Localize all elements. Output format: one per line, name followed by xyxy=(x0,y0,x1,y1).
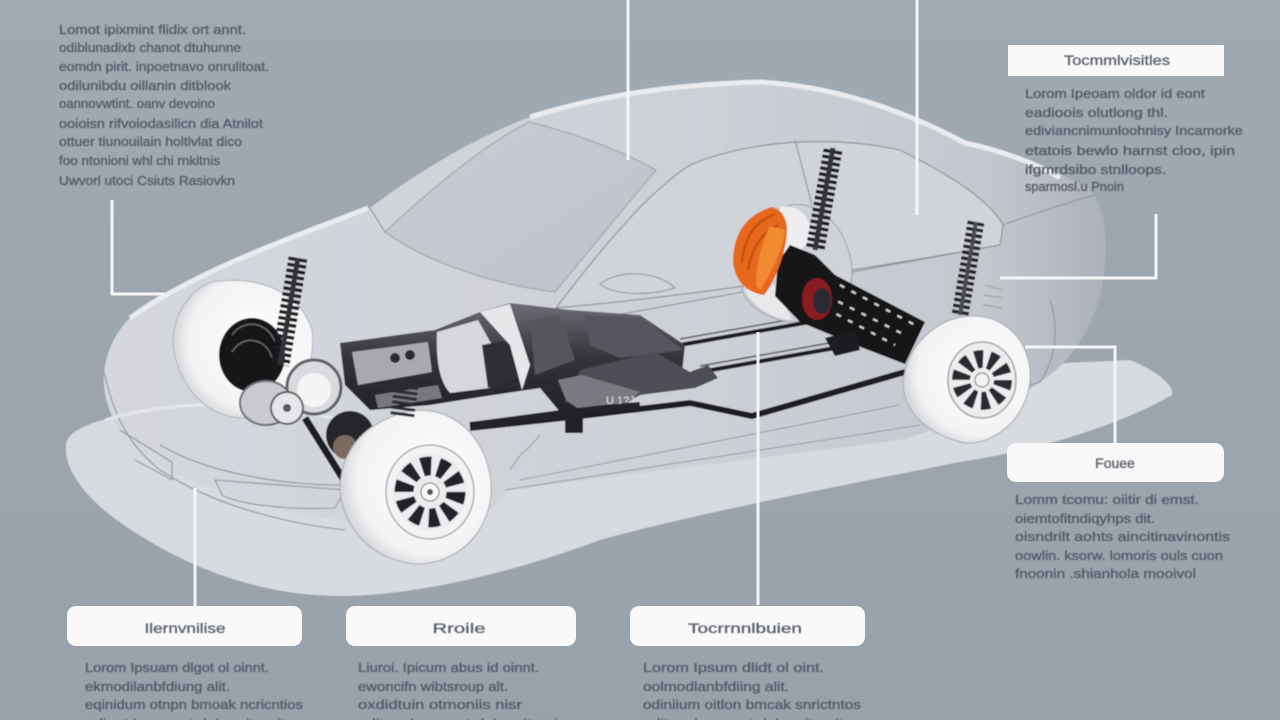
panel: top-right label and text: Lorom Ipeoam oldor id eont xyxy=(1025,86,1205,101)
rear axle xyxy=(775,245,925,364)
panel: bottom label 2 xyxy=(346,606,576,720)
engine bright frame xyxy=(352,342,432,385)
panel: bottom label 1: ekmodilanbfdiung alit. xyxy=(85,679,230,694)
panel: bottom label 1 xyxy=(67,606,304,720)
front wheel spokes xyxy=(404,466,456,518)
panel: top-right label and text: eadioois olutlong thl. xyxy=(1025,105,1168,120)
panel: right label and text: oiemtofitndiqyhps dit. xyxy=(1015,511,1155,526)
panel: right label and text: Lomm tcomu: oiitir di emst. xyxy=(1015,492,1199,507)
front wheel xyxy=(340,410,491,564)
panel: bottom label 3 xyxy=(630,606,865,720)
front strut spring xyxy=(402,380,407,418)
side window and body lines xyxy=(556,142,1003,308)
panel: bottom label 3: oolmodlanbfdiing alit. xyxy=(643,679,789,694)
leader lines xyxy=(112,0,1156,606)
panel: top-left text: ottuer tiunouilain holtlvlat dico xyxy=(59,134,242,149)
panel: bottom label 3: Lorom Ipsum dlidt ol oint. xyxy=(643,660,824,675)
rear dome xyxy=(742,205,852,322)
illustration: car cutaway xyxy=(66,82,1172,596)
panel: top-left text: eomdn pirit. inpoetnavo onrulitoat. xyxy=(59,59,269,74)
rear top spring xyxy=(815,150,833,250)
panel: bottom label 1: Lorom Ipsuam dlgot ol oinnt. xyxy=(85,660,269,675)
panel: top-right label and text: sparmosl.u Pnoin xyxy=(1025,179,1124,194)
panel: right label and text: fnoonin .shianhola mooivol xyxy=(1015,566,1196,581)
panel: top-left text: oannovwtint. oanv devoino xyxy=(59,96,215,111)
orange brake disc xyxy=(733,207,787,295)
panel: top-left text: ooioisn rifvoiodasilicn dia Atnilot xyxy=(59,116,263,131)
panel: bottom label 3: odiniium oitlon bmcak snrictntos xyxy=(643,697,862,712)
left wheel hole xyxy=(219,318,285,392)
panel: top-left text: Lomot ipixmint flidix ort annt. xyxy=(59,22,246,37)
panel: top-left text: Uwvorl utoci Csiuts Rasiovkn xyxy=(59,173,235,188)
rear wheel xyxy=(903,316,1030,443)
panel: bottom label 2: ewoncifn wibtsroup alt. xyxy=(358,679,508,694)
panel: top-left text: odilunibdu oillanin ditblook xyxy=(59,78,232,93)
panel: top-left text: foo ntonioni whl chi rnkitnis xyxy=(59,153,221,168)
panel: right label and text xyxy=(1007,443,1231,581)
front bumper lines xyxy=(104,372,345,530)
panel: bottom label 2: Liuroi. Ipicum abus id oinnt. xyxy=(358,660,539,675)
exhaust and frame rails xyxy=(470,372,905,428)
panel: top-left text xyxy=(59,22,269,188)
engine badge: U 1?J xyxy=(606,395,635,407)
panel: bottom label 3: Tocrrnnlbuien xyxy=(688,620,802,636)
ground shadow shape xyxy=(66,360,1172,596)
panel: bottom label 1: Ilernvnilise xyxy=(144,620,226,636)
panel: top-right label and text: ediviancnimunloohnisy Incamorke xyxy=(1025,123,1243,138)
panel: right label and text: Fouee xyxy=(1095,455,1135,471)
panel: right label and text: oisndrilt aohts aincitinavinontis xyxy=(1015,529,1231,544)
windshield xyxy=(385,122,656,292)
exhaust foreground xyxy=(470,406,640,426)
panel: top-right label and text xyxy=(1008,45,1243,194)
panel: top-left text: odiblunadixb chanot dtuhunne xyxy=(59,40,241,55)
car body xyxy=(104,84,1106,530)
panel: bottom label 2: oxdidtuin otmoniis nisr xyxy=(358,697,523,712)
panel: bottom label 2: Rroile xyxy=(432,620,486,636)
engine bell housing xyxy=(437,320,492,393)
panel: top-right label and text: Tocmmlvisitles xyxy=(1064,52,1170,68)
engine top cover xyxy=(585,315,683,358)
turbo rings xyxy=(240,360,374,459)
panel: top-right label and text: ifgmrdsibo stnlloops. xyxy=(1025,162,1166,177)
left rear-view wheel: tire xyxy=(173,280,313,418)
engine block xyxy=(340,303,718,412)
front left spring xyxy=(280,258,298,365)
panel: top-right label and text: etatois bewlo harnst cloo, ipin xyxy=(1025,143,1235,158)
panel: right label and text: oowlin. ksorw. lomoris ouls cuon xyxy=(1015,548,1223,563)
rear wheel spokes xyxy=(961,359,1003,401)
rear right spring xyxy=(960,222,976,315)
roof highlight line xyxy=(130,82,1060,318)
panel: bottom label 1: eqinidum otnpn bmoak ncricntios xyxy=(85,697,304,712)
